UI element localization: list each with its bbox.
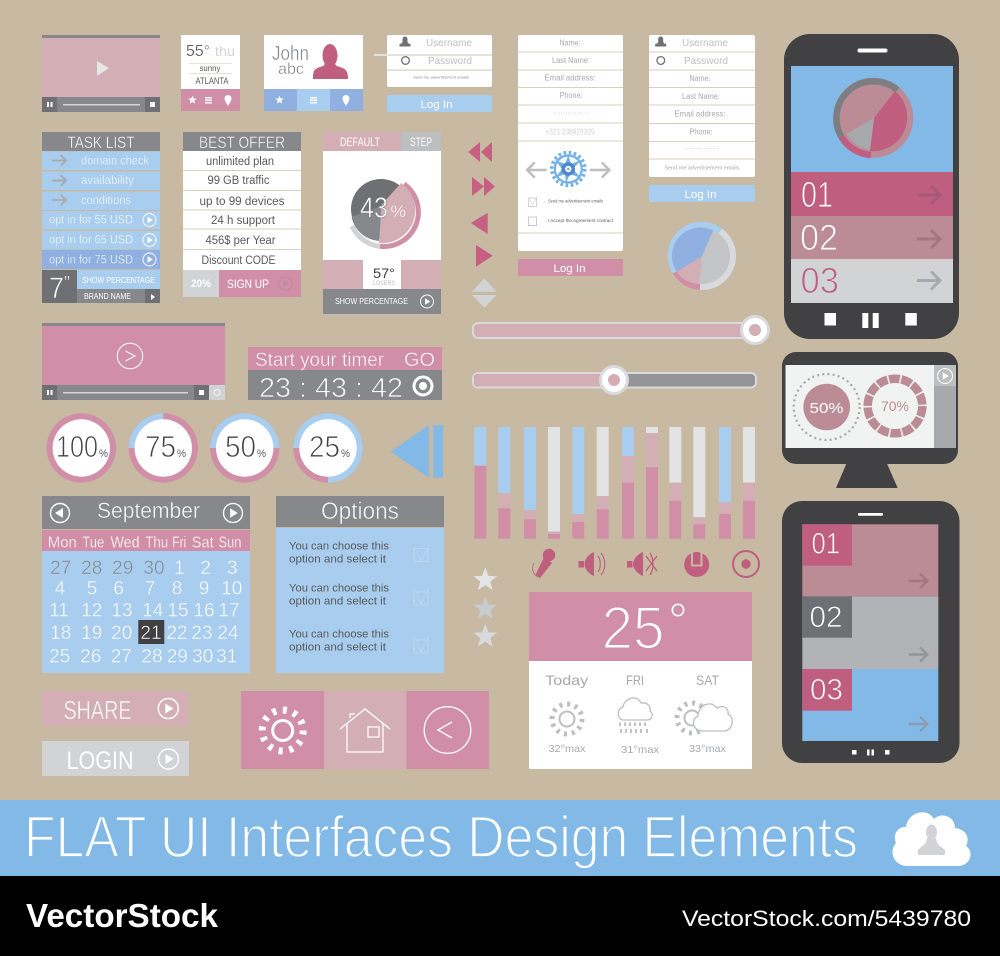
calendar: September <box>42 496 250 673</box>
weather forecast panel: 25 <box>602 594 664 662</box>
options panel: option and select it <box>289 553 386 565</box>
login and registration form <box>649 35 755 202</box>
options panel: You can choose this <box>289 583 390 595</box>
donut: 100%: % <box>99 448 108 460</box>
icon: person silhouette <box>313 44 348 79</box>
calendar: September: 5 <box>87 578 97 600</box>
phone mockup <box>784 34 959 339</box>
login and registration form: Username <box>682 37 728 49</box>
button: log in blue <box>649 185 755 202</box>
calendar: September: 28 <box>81 558 102 579</box>
calendar: September: 1 <box>174 558 185 579</box>
calendar: September: 12 <box>81 601 102 622</box>
registration form with gear: I Accept the Agreement contract <box>548 218 614 223</box>
calendar: September: 24 <box>217 623 239 644</box>
calendar: September: 13 <box>111 601 133 622</box>
donut: 75% <box>129 413 198 483</box>
banner: title: FLAT UI Interfaces Design Elements <box>24 805 858 870</box>
calendar: September: Tue <box>82 534 104 552</box>
best offer pricing panel: BEST OFFER <box>199 133 285 152</box>
best offer pricing panel: up to 99 devices <box>200 196 285 208</box>
calendar: September: 29 <box>167 646 188 667</box>
phone mockup: 03 <box>800 260 839 301</box>
task list panel: SHOW PERCENTAGE <box>82 275 155 285</box>
calendar: September: 14 <box>142 601 164 622</box>
button: login <box>42 741 189 776</box>
task list panel: ” <box>64 273 70 293</box>
calendar: September: 27 <box>50 558 71 579</box>
button: log in pink <box>518 259 623 276</box>
calendar: September: Thu <box>145 534 168 552</box>
task list panel: 7 <box>49 272 64 305</box>
registration form with gear: ··············· <box>554 108 588 118</box>
gauge: 70% <box>868 379 922 433</box>
login and registration form: Phone: <box>690 128 712 136</box>
icon: sun <box>262 710 303 751</box>
login form: compact <box>374 35 492 112</box>
icon: gear with arrows <box>527 152 609 186</box>
registration form with gear: +321 338928329 <box>546 128 595 136</box>
media control arrows <box>468 142 497 308</box>
registration form with gear: Send me advertisement emails <box>548 198 603 204</box>
rating stars <box>473 568 497 647</box>
percentage panel: 43%: SHOW PERCENTAGE <box>335 296 408 306</box>
login form: compact: Username <box>426 37 472 49</box>
calendar: September: Mon <box>48 534 77 552</box>
button: share: SHARE <box>64 695 132 725</box>
calendar: September: 2 <box>200 558 211 579</box>
calendar: September: 9 <box>199 578 209 600</box>
pie chart: 43%: % <box>390 202 406 221</box>
registration form with gear: Last Name: <box>552 56 590 65</box>
donut: 50% <box>210 413 279 483</box>
calendar: September: 17 <box>218 601 240 622</box>
weather forecast panel: 32°max <box>548 743 586 755</box>
percentage panel: 43%: STEP <box>410 137 432 149</box>
icon: mute <box>627 552 657 576</box>
video player: wide <box>42 323 225 400</box>
calendar: September: 16 <box>193 601 215 622</box>
weather forecast panel <box>529 592 752 769</box>
best offer pricing panel: 456$ per Year <box>206 235 276 247</box>
bar chart: stacked equaliser <box>474 427 755 539</box>
donut: 25%: 25 <box>309 429 340 464</box>
timer widget: 23 : 43 : 42 <box>259 372 403 403</box>
slider: half <box>473 366 756 394</box>
login and registration form: Name: <box>690 74 710 83</box>
task list panel: opt in for 65 USD <box>49 234 133 246</box>
donut: 50%: 50 <box>225 429 256 464</box>
button: log in blue: Log In <box>684 189 716 201</box>
calendar: September: 28 <box>141 646 163 667</box>
task list panel: domain check <box>81 156 149 168</box>
icon: cloud with user <box>892 812 971 866</box>
options panel: You can choose this <box>289 629 390 641</box>
weather card: Atlanta: ATLANTA <box>196 76 229 87</box>
calendar: September: 6 <box>113 578 124 600</box>
calendar: September: 29 <box>112 558 133 579</box>
calendar: September: 3 <box>227 558 238 579</box>
phone mockup: 01 <box>801 174 833 215</box>
login form: compact: Send me advertisement emails <box>413 74 469 80</box>
calendar: September: 27 <box>111 646 132 667</box>
calendar: September: Sat <box>192 534 214 552</box>
timer widget: GO <box>404 350 435 371</box>
calendar: September: 23 <box>191 623 213 644</box>
calendar: September: 26 <box>80 646 101 667</box>
best offer pricing panel: SIGN UP <box>227 277 269 291</box>
weather forecast panel: ° <box>668 593 688 649</box>
task list panel: opt in for 75 USD <box>49 254 133 266</box>
icon: sun <box>552 704 582 734</box>
task list panel <box>42 132 160 305</box>
footer: watermark bar: VectorStock.com/5439780 <box>682 906 971 931</box>
pie chart: 43% <box>351 179 418 247</box>
calendar: September: 8 <box>172 578 182 600</box>
percentage panel: 43%: DEFAULT <box>340 137 380 149</box>
tablet mockup <box>782 501 960 763</box>
slider: full <box>473 316 768 344</box>
pie chart: blue and pink <box>668 222 736 290</box>
tablet mockup: 03 <box>810 674 843 706</box>
icon: speaker <box>578 552 605 576</box>
button: log in: Log In <box>420 99 452 111</box>
weather card: Atlanta: 55° <box>186 43 210 60</box>
task list panel: opt in for 55 USD <box>49 214 133 226</box>
options panel: option and select it <box>289 596 386 608</box>
best offer pricing panel: 20% <box>191 278 211 290</box>
profile card: John <box>264 35 363 111</box>
calendar: September: 19 <box>81 623 102 644</box>
icon: house <box>340 709 390 752</box>
donut: 100%: 100 <box>56 429 98 464</box>
percentage panel: 43%: 57° <box>373 265 395 281</box>
registration form with gear: Name: <box>560 38 580 48</box>
options panel <box>276 496 444 673</box>
login and registration form: Last Name: <box>682 92 720 101</box>
calendar: September: 20 <box>111 623 132 644</box>
calendar: September: 15 <box>167 601 189 622</box>
calendar: September: 30 <box>192 646 213 667</box>
phone mockup: 02 <box>800 217 838 258</box>
calendar: September: Fri <box>172 534 186 552</box>
profile card: John: abc <box>278 61 304 78</box>
best offer pricing panel: 99 GB traffic <box>208 175 270 187</box>
weather card: Atlanta: thu <box>215 43 235 59</box>
weather card: Atlanta: sunny <box>200 64 220 73</box>
gauge: 70%: 70% <box>881 398 909 414</box>
weather forecast panel: 31°max <box>621 744 660 756</box>
icon: skip back <box>391 425 443 478</box>
footer: watermark bar: VectorStock <box>26 897 219 934</box>
button: log in pink: Log In <box>554 263 586 275</box>
calendar: September: 7 <box>145 578 155 600</box>
button: share <box>42 691 189 726</box>
icon: sun behind cloud <box>677 703 732 733</box>
login and registration form: Password <box>684 55 728 67</box>
calendar: September: Sun <box>218 534 242 552</box>
icon: power <box>684 551 709 577</box>
button: login: LOGIN <box>66 747 134 775</box>
icon: record <box>733 551 759 577</box>
pie chart <box>833 78 913 158</box>
calendar: September: 11 <box>49 601 69 622</box>
best offer pricing panel: unlimited plan <box>206 156 274 168</box>
calendar: September: 10 <box>221 578 242 600</box>
task list panel: TASK LIST <box>68 133 134 152</box>
calendar: September: 30 <box>143 558 165 579</box>
icon tiles: sun, home, back <box>241 691 489 769</box>
monitor mockup <box>782 352 958 488</box>
weather forecast panel: SAT <box>696 672 719 688</box>
registration form with gear <box>518 35 623 276</box>
calendar: September: 22 <box>166 623 188 644</box>
timer widget: Start your timer <box>255 350 385 371</box>
timer widget <box>248 347 442 403</box>
icon: rain cloud <box>618 698 652 733</box>
login and registration form: ··············· <box>684 144 720 153</box>
best offer pricing panel: Discount CODE <box>202 255 276 267</box>
login form: compact: Password <box>428 55 472 67</box>
weather card: Atlanta <box>181 35 240 111</box>
gauge: 50% <box>794 374 860 440</box>
login and registration form: Send me advertisement emails <box>664 166 740 172</box>
registration form with gear: Email address: <box>544 74 596 82</box>
calendar: September: 18 <box>50 623 71 644</box>
profile card: John: John <box>272 43 309 65</box>
options panel: option and select it <box>289 642 386 654</box>
footer: watermark bar <box>0 876 1000 956</box>
options panel: You can choose this <box>289 540 390 552</box>
icon: microphone <box>533 549 555 578</box>
donut: 75%: 75 <box>145 429 176 464</box>
calendar: September: September <box>97 498 200 523</box>
percentage panel: 43%: LOSERS <box>373 281 395 287</box>
tablet mockup: 01 <box>812 528 840 560</box>
options panel: Options <box>321 498 399 525</box>
calendar: September: 21 <box>140 623 162 644</box>
donut: 100% <box>47 413 116 483</box>
donut: 25%: % <box>341 448 350 460</box>
donut: 25% <box>293 413 363 483</box>
donut: 75%: % <box>177 448 186 460</box>
task list panel: availability <box>81 175 134 187</box>
task list panel: conditions <box>81 195 131 207</box>
icon: back circle <box>424 707 471 753</box>
weather forecast panel: Today <box>545 672 588 688</box>
calendar: September: 4 <box>55 578 66 600</box>
calendar: September: 31 <box>216 646 237 667</box>
percentage panel: 43% <box>323 132 441 314</box>
calendar: September: 25 <box>49 646 70 667</box>
best offer pricing panel <box>183 132 301 297</box>
login and registration form: Email address: <box>674 110 726 118</box>
registration form with gear: Phone: <box>560 91 582 100</box>
donut: 50%: % <box>257 448 266 460</box>
calendar: September: Wed <box>110 534 140 552</box>
weather forecast panel: FRI <box>626 672 644 688</box>
weather forecast panel: 33°max <box>689 743 727 755</box>
tablet mockup: 02 <box>810 601 842 634</box>
gauge: 50%: 50% <box>810 400 844 417</box>
icon: play circle <box>117 343 143 369</box>
pie chart: 43%: 43 <box>360 193 388 225</box>
best offer pricing panel: 24 h support <box>211 215 276 227</box>
video player: small <box>42 35 160 112</box>
task list panel: BRAND NAME <box>84 292 131 301</box>
